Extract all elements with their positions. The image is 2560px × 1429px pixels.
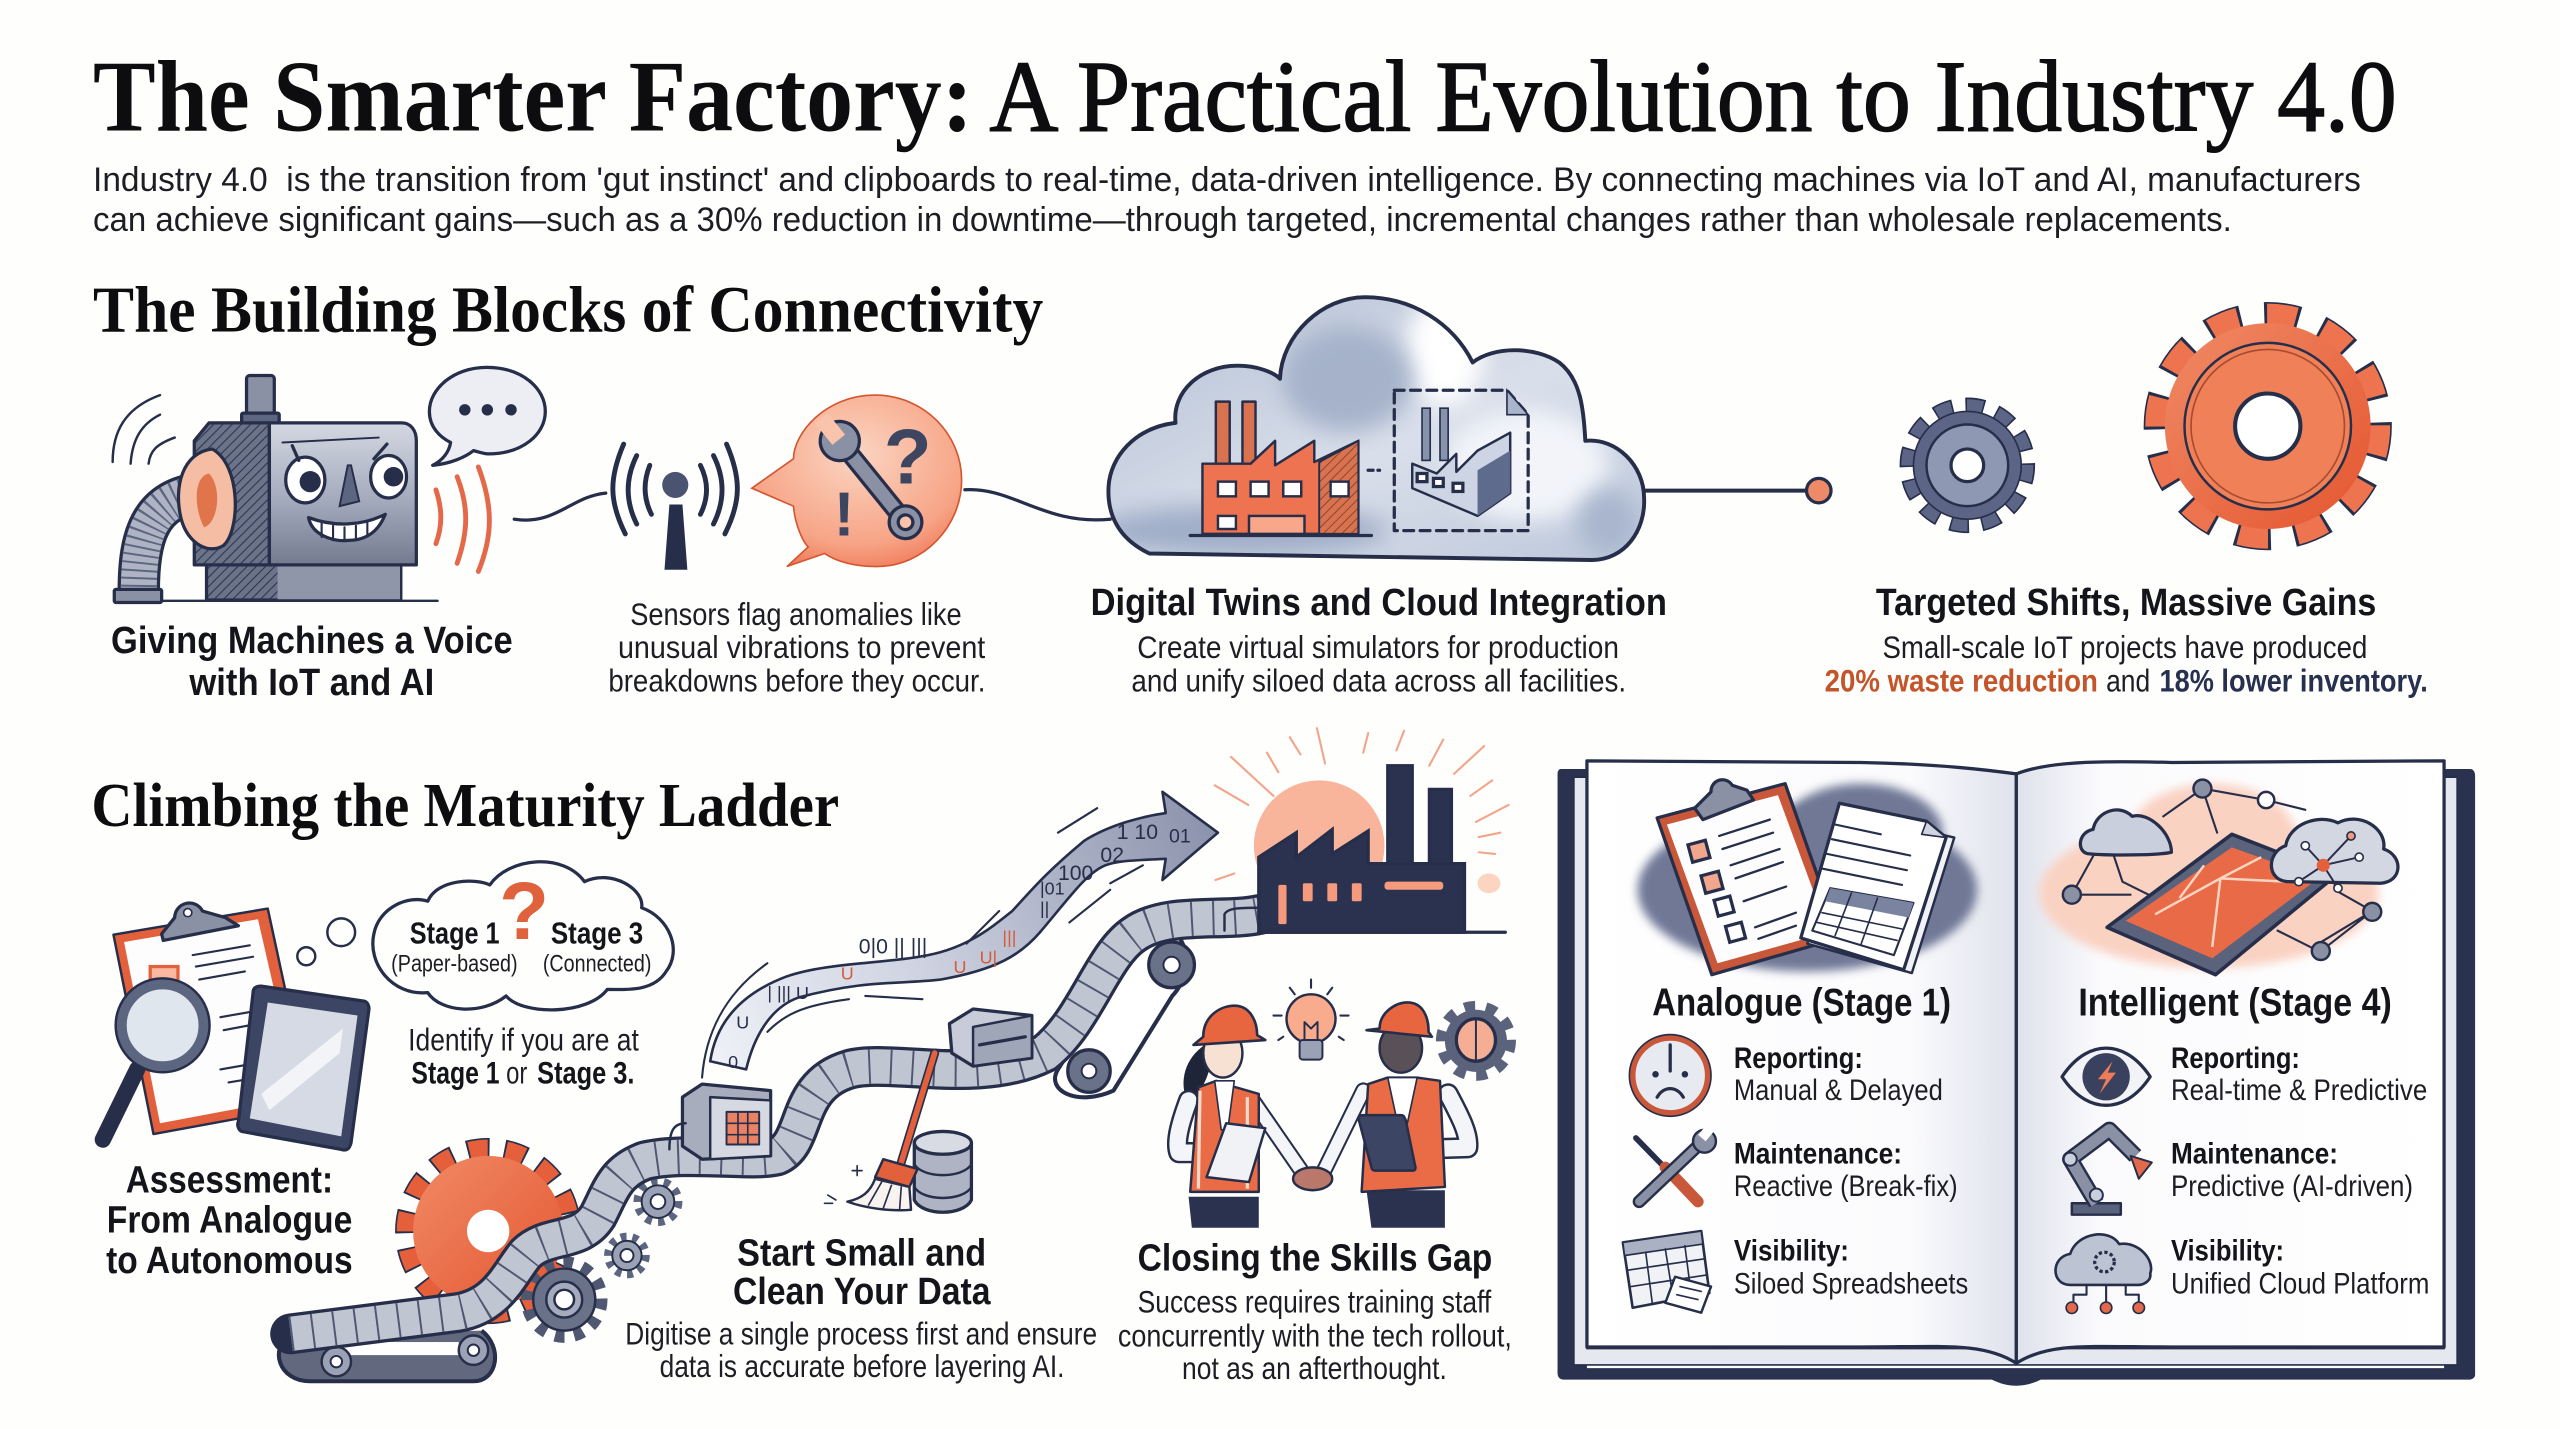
text: maintenance predictive <box>2171 1137 2413 1203</box>
binary digits: 100 <box>1058 862 1093 885</box>
icon: alert bubble with wrench: ! <box>834 481 854 550</box>
hard hat <box>1367 1002 1432 1037</box>
wire <box>514 493 606 520</box>
left sleeve <box>1324 1091 1363 1171</box>
text: reporting real-time <box>2171 1042 2427 1107</box>
text: visibility siloed: Siloed Spreadsheets <box>1734 1268 1968 1301</box>
right sleeve <box>1254 1102 1301 1171</box>
upper return loop <box>1055 928 1194 1097</box>
smile <box>309 514 385 541</box>
binary digits: U <box>841 964 854 984</box>
broom <box>824 1053 935 1210</box>
box on conveyor <box>949 1009 1032 1066</box>
text: visibility unified: Visibility: <box>2171 1234 2284 1267</box>
text: identify stage: or <box>506 1054 528 1090</box>
binary digits: 01 <box>1169 825 1191 847</box>
dashed data link <box>1368 469 1380 471</box>
vest <box>1190 1081 1259 1192</box>
text: assessment: Assessment: <box>126 1159 333 1202</box>
orange factory <box>1190 402 1371 536</box>
icon: clipboard, magnifier and tablet <box>103 903 369 1150</box>
machine eyes <box>286 444 407 503</box>
thought cloud: stage 1 or 3: (Paper-based) <box>391 951 518 977</box>
text: targeted shifts: Targeted Shifts, Massive Gains <box>1876 581 2376 624</box>
binary digits: U <box>953 957 966 977</box>
legs <box>1367 1190 1445 1228</box>
tablet <box>238 986 369 1150</box>
binary digits: 0 <box>728 1052 738 1072</box>
icon: handshake <box>1293 1167 1332 1190</box>
text: sensors <box>608 596 985 699</box>
hard hat <box>1193 1006 1265 1045</box>
text: targeted shifts <box>1825 581 2428 699</box>
book cover <box>1558 769 2475 1386</box>
thought bubbles <box>297 918 355 965</box>
heading: intelligent: Intelligent (Stage 4) <box>2078 982 2392 1025</box>
thought cloud: stage 1 or 3: Stage 1 <box>410 918 500 951</box>
icon: eye with bolt <box>2062 1048 2150 1105</box>
text: start small: Digitise a single process first and ensure <box>625 1316 1097 1351</box>
text: maintenance reactive: Maintenance: <box>1734 1137 1902 1170</box>
icon: large gear <box>2157 315 2379 537</box>
title <box>93 41 2397 153</box>
text: digital twins: Digital Twins and Cloud Integration <box>1091 581 1667 624</box>
text: start small: Clean Your Data <box>733 1270 991 1313</box>
text: assessment <box>106 1159 353 1282</box>
text: maintenance predictive: Maintenance: <box>2171 1137 2338 1170</box>
text: closing the skills gap: Closing the Skills Gap <box>1138 1237 1492 1280</box>
text: closing the skills gap: concurrently with the tech rollout, <box>1118 1319 1512 1354</box>
icon: cloud platform <box>2056 1234 2151 1313</box>
ear <box>178 449 235 549</box>
text: identify stage: Stage 3. <box>537 1054 634 1090</box>
database <box>914 1131 971 1212</box>
icon: crossed tools <box>1636 1125 1716 1202</box>
icon: brain gear <box>1442 1007 1510 1075</box>
binary digits: | ||| U <box>767 983 809 1003</box>
text: reporting real-time: Real-time & Predictive <box>2171 1074 2427 1107</box>
head <box>1380 1024 1422 1073</box>
icon: small gear <box>1909 407 2026 524</box>
analogue illustration <box>1638 780 1977 975</box>
tablet <box>1358 1115 1416 1171</box>
tablet <box>2107 834 2336 975</box>
intro text: Industry 4.0 is the transition from 'gut instinct' and clipboards to real-time, data-driven intelligence. By connecting machines via IoT and AI, manufacturers <box>93 161 2361 199</box>
text: closing the skills gap: Success requires training staff <box>1138 1285 1492 1320</box>
right page <box>2016 761 2444 1363</box>
text: maintenance reactive <box>1734 1137 1958 1203</box>
text: assessment: to Autonomous <box>106 1239 353 1282</box>
icon: sad clock <box>1629 1035 1711 1116</box>
text: start small <box>625 1231 1097 1384</box>
icon: cloud with digital twin <box>1094 296 1644 560</box>
clipboard <box>113 903 310 1134</box>
text: identify stage: Identify if you are at <box>408 1021 639 1057</box>
text: digital twins: Create virtual simulators for production <box>1137 629 1619 665</box>
binary digits: || <box>1040 898 1049 918</box>
intelligent illustration <box>2039 780 2398 975</box>
text: visibility siloed <box>1734 1234 1968 1301</box>
binary digits: ||| <box>1002 928 1016 948</box>
right cloud <box>2271 819 2398 883</box>
text: reporting manual <box>1734 1042 1943 1107</box>
thought cloud: stage 1 or 3: (Connected) <box>543 951 651 977</box>
icon: alert bubble with wrench <box>752 395 962 567</box>
binary digits: 02 <box>1100 844 1124 867</box>
paper with table <box>1801 803 1954 973</box>
left sleeve <box>1178 1100 1215 1153</box>
icon: robot arm <box>2064 1130 2152 1215</box>
text: reporting real-time: Reporting: <box>2171 1042 2300 1075</box>
intro text: can achieve significant gains—such as a 30% reduction in downtime—through targeted, incremental changes rather than wholesale replacements. <box>93 201 2232 239</box>
vest <box>1362 1078 1445 1192</box>
right sleeve <box>1414 1094 1468 1149</box>
thought cloud: stage 1 or 3 <box>373 862 673 1010</box>
heading: building blocks: The Building Blocks of Connectivity <box>93 274 1044 346</box>
clipboard <box>1207 1123 1265 1182</box>
binary digits: |01 <box>1040 879 1065 899</box>
wire <box>965 490 1110 520</box>
icon: sun behind factory <box>1215 728 1509 911</box>
icon: dark factory <box>1224 766 1505 932</box>
legs <box>1189 1197 1259 1228</box>
text: assessment: From Analogue <box>107 1199 352 1242</box>
icon: antenna sensor <box>613 444 737 570</box>
text: identify stage: Stage 1 <box>411 1054 500 1090</box>
text: sensors: Sensors flag anomalies like <box>630 596 962 632</box>
text: maintenance reactive: Reactive (Break-fix) <box>1734 1170 1958 1203</box>
text: sensors: breakdowns before they occur. <box>608 663 985 699</box>
icon: speech bubble <box>429 367 545 465</box>
icon: talking machine with ear <box>113 376 489 602</box>
icon: female worker <box>1178 1006 1301 1228</box>
left cloud <box>2080 810 2171 855</box>
binary digits: U| <box>980 947 997 967</box>
dashed digital copy <box>1394 390 1528 531</box>
conveyor belt <box>279 914 1260 1381</box>
icon: small gears under conveyor <box>528 1182 678 1336</box>
icon: spreadsheet window <box>1623 1231 1711 1313</box>
text: giving machines a voice: Giving Machines a Voice <box>111 619 513 662</box>
text: targeted shifts: and <box>2106 663 2150 699</box>
device box on conveyor <box>669 1084 771 1159</box>
text: identify stage <box>408 1021 639 1090</box>
text: giving machines a voice <box>111 619 513 704</box>
left page <box>1587 761 2016 1363</box>
icon: male worker <box>1324 1002 1468 1228</box>
page stack <box>1574 777 2457 1365</box>
text: reporting manual: Reporting: <box>1734 1042 1863 1075</box>
text: closing the skills gap: not as an afterthought. <box>1182 1351 1447 1386</box>
icon: alert bubble with wrench: ? <box>884 412 932 500</box>
heading: analogue: Analogue (Stage 1) <box>1652 982 1951 1025</box>
text: closing the skills gap <box>1118 1237 1512 1386</box>
clipboard <box>1657 780 1839 975</box>
text: digital twins <box>1091 581 1667 699</box>
magnifier <box>103 980 208 1140</box>
binary digits: U <box>736 1013 749 1033</box>
text: start small: Start Small and <box>737 1231 986 1274</box>
connector with node <box>1646 478 1831 503</box>
text: visibility unified <box>2171 1234 2429 1301</box>
ponytail <box>1184 1045 1211 1100</box>
text: targeted shifts: Small-scale IoT projects have produced <box>1882 629 2367 665</box>
intro text <box>93 161 2361 239</box>
text: sensors: unusual vibrations to prevent <box>618 629 985 665</box>
icon: broom and database <box>824 1053 971 1212</box>
wrench <box>806 406 931 547</box>
binary digits: 0|0 || ||| <box>859 935 927 958</box>
thought cloud: stage 1 or 3: Stage 3 <box>551 918 643 951</box>
lower return loop <box>279 1331 495 1381</box>
icon: light bulb <box>1273 980 1349 1060</box>
icon: orange gear <box>407 1149 570 1313</box>
text: visibility unified: Unified Cloud Platform <box>2171 1268 2429 1301</box>
text: maintenance predictive: Predictive (AI-driven) <box>2171 1170 2413 1203</box>
title: The Smarter Factory: <box>93 41 973 153</box>
text: giving machines a voice: with IoT and AI <box>188 661 434 704</box>
text: digital twins: and unify siloed data across all facilities. <box>1131 663 1626 699</box>
text: visibility siloed: Visibility: <box>1734 1234 1849 1267</box>
data ribbon arrow <box>702 792 1218 1078</box>
text: start small: data is accurate before layering AI. <box>660 1349 1064 1384</box>
thought cloud: stage 1 or 3: ? <box>499 866 549 957</box>
panel: open book comparison <box>1558 761 2475 1386</box>
cloud network <box>2295 832 2363 892</box>
title: A Practical Evolution to Industry 4.0 <box>989 41 2397 153</box>
binary digits: 1 10 <box>1117 821 1158 844</box>
binary digits <box>728 821 1191 1072</box>
heading: maturity ladder: Climbing the Maturity Ladder <box>91 772 839 840</box>
text: targeted shifts: 18% lower inventory. <box>2160 663 2428 699</box>
text: targeted shifts: 20% waste reduction <box>1825 663 2098 699</box>
head <box>1203 1029 1242 1078</box>
text: reporting manual: Manual & Delayed <box>1734 1074 1943 1107</box>
